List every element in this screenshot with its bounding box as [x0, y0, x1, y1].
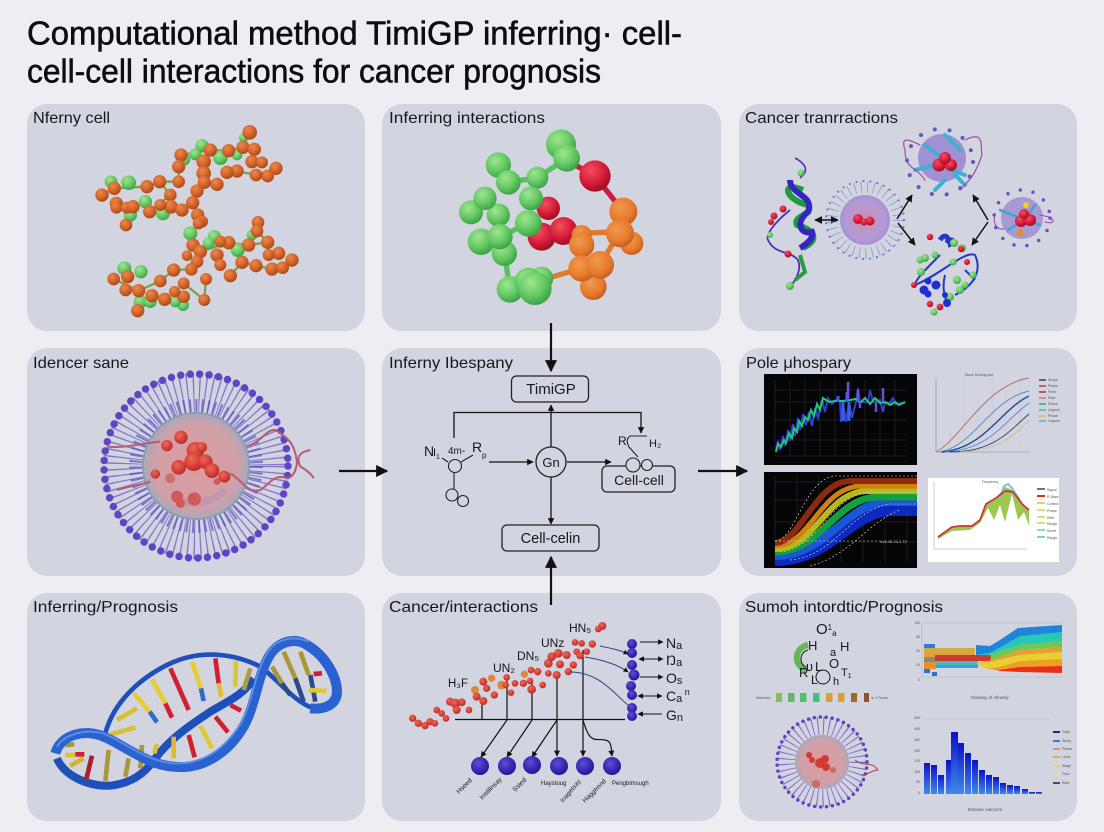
arrow: left panel to center [339, 470, 387, 472]
diagram: chain labels: HN₅ [569, 621, 591, 635]
chart: blue bars: Disease outcome [968, 807, 1003, 812]
chart: blue bars: 300 [914, 738, 920, 742]
right column of blue balls with labels: a [676, 693, 683, 705]
left molecule: 4m- [448, 446, 465, 457]
left molecule [424, 439, 487, 506]
chart: white panel with peak line: Score [1047, 529, 1056, 533]
chart: layered heatmap: 0 [918, 678, 920, 682]
chart: blue bars: 250 [914, 749, 920, 753]
right column of blue balls with labels: a [676, 657, 683, 669]
heading: Cancer/interactions [389, 599, 538, 616]
heading: Nferny cell [33, 110, 110, 127]
node: Gn [536, 447, 566, 477]
chart: rising curves: Legend [1048, 419, 1060, 423]
chart: layered heatmap: 20 [916, 663, 920, 667]
chart: rising curves: Stock Scoring plot [965, 373, 993, 377]
protein: helix ribbon [767, 158, 813, 290]
chart: rising curves: Scope [1048, 378, 1058, 382]
panel: Cancer tranrractions [739, 104, 1077, 331]
chart: blue bars: 0 [918, 791, 920, 795]
legend swatches: ► 1 Room [871, 696, 888, 700]
molecule: green, red and orange cluster [459, 129, 643, 305]
icon: membrane cell with red core [104, 374, 314, 558]
right column of blue balls with labels: G [666, 707, 677, 723]
chart: blue bars: Level [1062, 755, 1071, 759]
right column of blue balls with labels: O [666, 670, 677, 686]
left molecule: R [472, 439, 482, 455]
bottom row of blue balls with labels [455, 756, 649, 804]
chart: layered heatmap: 100 [914, 621, 920, 625]
chart: rising curves [936, 373, 1060, 452]
right column of blue balls with labels: n [677, 712, 683, 724]
panel: Inferring/Prognosis [27, 593, 365, 821]
left molecule: 1 [436, 454, 440, 461]
node: TimiGP: TimiGP [526, 381, 576, 398]
chart: blue bars: Phase [1062, 747, 1072, 751]
bottom row of blue balls with labels: Haggtrend [581, 778, 608, 804]
right column of blue balls with labels: a [676, 640, 683, 652]
chart: blue bars: 50 [916, 780, 920, 784]
right column of blue balls with labels: N [666, 635, 676, 651]
diagram: chain labels: UN₂ [493, 661, 515, 675]
chemical sketch: T [841, 667, 848, 679]
chart: white panel with peak line: Range [1047, 522, 1057, 526]
chemical sketch [797, 621, 852, 688]
right column of blue balls with labels [570, 635, 690, 724]
chart: blue bars: Flow [1062, 772, 1070, 776]
icon: small cell [826, 181, 904, 259]
bottom row of blue balls with labels: Hseed [455, 777, 474, 795]
icon: top cell with red core [904, 129, 982, 195]
chart: rising curves: Phase [1048, 414, 1058, 418]
heading: Idencer sane [33, 355, 129, 372]
chart: blue bars: Rate [1062, 781, 1069, 785]
chart: blue bars: 150 [914, 770, 920, 774]
icon: DNA double helix [55, 638, 337, 786]
molecule: lower orange and green chain [107, 216, 299, 317]
chart: rising curves: Point [1048, 390, 1056, 394]
chart: white panel with peak line: R-Base [1047, 495, 1059, 499]
node: Cell-cell with molecule: Cell-cell [614, 472, 664, 488]
title: cell-cell interactions for cancer prognosis [27, 52, 601, 90]
chart: blue bars: 200 [914, 759, 920, 763]
chart: blue bars: 400 [914, 727, 920, 731]
chemical sketch: a [830, 647, 837, 659]
chart: black sigmoid bands: #18.45 24.2.72 [880, 539, 907, 544]
bottom row of blue balls with labels: Pengbimsugh [612, 781, 649, 787]
chemical sketch: h [833, 676, 839, 688]
chart: blue bars: Stage [1062, 764, 1071, 768]
node: Cell-cell with molecule: R [618, 434, 627, 448]
chemical sketch: L [811, 673, 818, 687]
left molecule: I [433, 447, 436, 459]
chart: layered heatmap: 80 [916, 635, 920, 639]
chart: white panel with peak line: Phase [1047, 509, 1057, 513]
right column of blue balls with labels: s [677, 675, 683, 687]
diagram: chain labels: H₃F [448, 678, 468, 690]
chemical sketch: H [840, 639, 849, 654]
heading: Sumoh intordtic/Prognosis [745, 599, 943, 616]
node: Cell-cell with molecule [602, 434, 675, 492]
panel: Nferny cell [27, 104, 365, 331]
heading: Inferring/Prognosis [33, 599, 178, 616]
node: TimiGP [512, 376, 588, 402]
chemical sketch: ʋ [806, 659, 813, 674]
title [27, 14, 682, 90]
diagram: chain labels [448, 621, 591, 690]
arrows: cell network [897, 195, 988, 245]
chart: rising curves: Rate [1048, 396, 1055, 400]
chemical sketch: a [832, 629, 837, 638]
chart: white panel with peak line: Range [1047, 536, 1057, 540]
chart: white panel with peak line: Signal [1047, 488, 1057, 492]
chart: white panel with peak line: Frequency [982, 480, 999, 484]
panel: Idencer sane [27, 348, 365, 576]
left molecule: N [424, 443, 434, 459]
node: Cell-celin: Cell-celin [521, 531, 580, 547]
node: Gn: Gn [542, 455, 560, 470]
chart: black spiky line [764, 374, 917, 465]
node: Cell-celin [502, 525, 599, 551]
chemical sketch: 1 [848, 673, 852, 680]
panel: Inferring interactions [382, 104, 721, 331]
right column of blue balls with labels: Ŋ [666, 652, 676, 668]
chart: white panel with peak line [928, 478, 1059, 562]
chart: layered heatmap: Diseasy of Alinesly [971, 695, 1010, 700]
bottom row of blue balls with labels: Haystoug [541, 781, 566, 787]
chemical sketch: R [799, 665, 808, 680]
chart: rising curves: Phase [1048, 384, 1058, 388]
icon: right cell with red core [994, 190, 1053, 246]
chart: blue bars: 500 [914, 716, 920, 720]
diagram: chain labels: DN₅ [517, 649, 539, 663]
arrow: center to charts [698, 470, 747, 472]
heading: Inferring interactions [389, 110, 545, 127]
chemical sketch: H [808, 638, 817, 653]
diagram connectors [454, 405, 641, 524]
bottom row of blue balls with labels: Ssted [511, 776, 528, 793]
chart: blue bars: Total [1062, 730, 1070, 734]
arrow: double-headed to cell [815, 219, 838, 221]
left molecule: p [482, 451, 487, 460]
heading: Inferny Ibespany [389, 355, 513, 372]
chemical sketch: O [829, 656, 839, 671]
bottom row of blue balls with labels: Inagetsay [559, 778, 583, 804]
molecule: upper orange and green chain [95, 125, 283, 231]
title: Computational method TimiGP inferring· cell- [27, 14, 682, 52]
legend swatches: Selection [756, 696, 770, 700]
panel: Cancer/interactions [382, 593, 721, 821]
right column of blue balls with labels: n [682, 687, 690, 697]
chart: white panel with peak line: Rate [1047, 516, 1054, 520]
baseline axis and branch arrows [455, 650, 625, 757]
protein: green and blue globule [911, 234, 978, 316]
chart: white panel with peak line: Control [1047, 502, 1059, 506]
chart: rising curves: Phase [1048, 402, 1058, 406]
icon: small membrane cell [777, 717, 878, 807]
chart: rising curves: Legend [1048, 408, 1060, 412]
panel: Inferny Ibespany [382, 348, 721, 576]
chart: blue bars: Study [1062, 739, 1071, 743]
panel: Sumoh intordtic/Prognosis [739, 593, 1077, 821]
chemical sketch: O [816, 621, 828, 638]
chemical sketch: L [815, 659, 822, 674]
node: Cell-cell with molecule: H₂ [649, 438, 661, 450]
chart: black sigmoid bands [764, 472, 917, 568]
chart: blue bars [914, 716, 1072, 812]
arrow: top panel down to diagram [550, 323, 552, 371]
chemical sketch: 1 [828, 623, 833, 632]
arrow: bottom panel up to diagram [550, 557, 552, 605]
chart: layered heatmap: 40 [916, 649, 920, 653]
heading: Cancer tranrractions [745, 110, 898, 127]
chart: layered heatmap [914, 621, 1062, 700]
bottom row of blue balls with labels: Instillnsay [478, 776, 504, 801]
diagram: rising cluster of red balls [409, 622, 606, 729]
panel: Pole μhospary [739, 348, 1077, 576]
right column of blue balls with labels: C [666, 688, 676, 704]
heading: Pole μhospary [746, 355, 851, 372]
legend swatches [756, 693, 888, 702]
diagram: chain labels: UNz [541, 636, 564, 650]
